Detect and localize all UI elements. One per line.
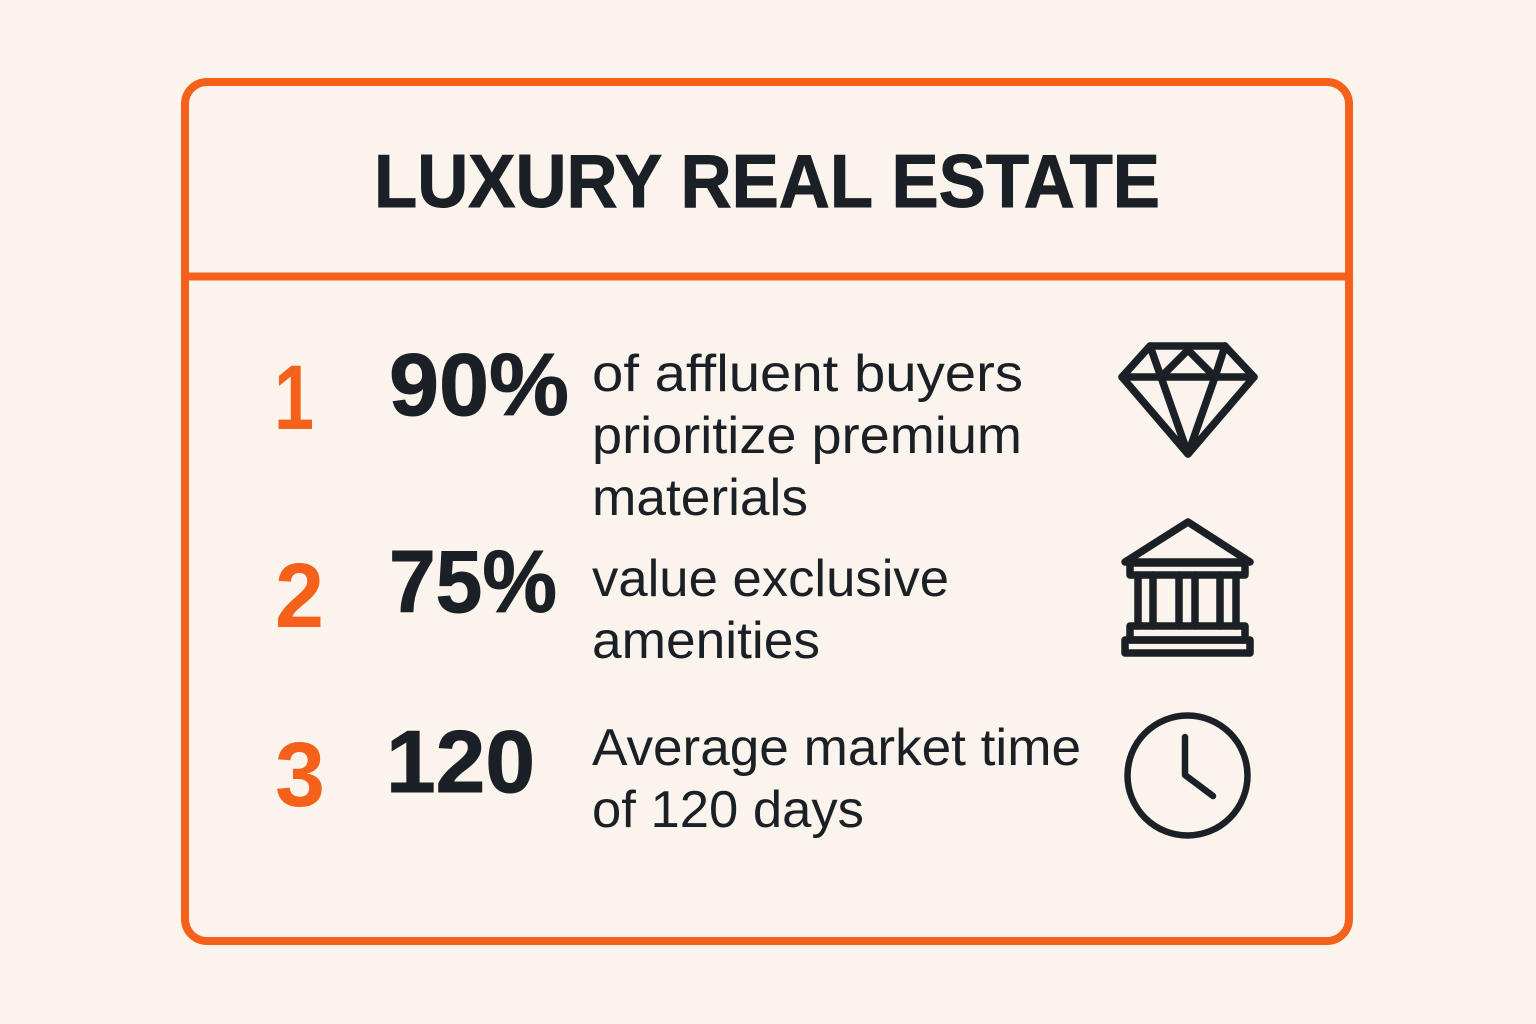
- description: premium materials: [592, 345, 1023, 527]
- description: premium materials: materials: [592, 469, 808, 527]
- stat 90%: 90%: [389, 335, 569, 434]
- title: LUXURY REAL ESTATE: [374, 139, 1160, 223]
- description: exclusive amenities: [592, 550, 949, 670]
- description: premium materials: prioritize premium: [592, 407, 1022, 465]
- icon: clock: [1128, 716, 1248, 836]
- number 1: 1: [274, 347, 314, 449]
- description: premium materials: of affluent buyers: [592, 345, 1023, 403]
- row 2: exclusive amenities: [275, 522, 1250, 670]
- description: exclusive amenities: value exclusive: [592, 550, 949, 608]
- description: market time: [592, 719, 1081, 839]
- icon: diamond: [1122, 346, 1254, 454]
- icon: classical building: [1125, 522, 1250, 653]
- description: market time: of 120 days: [592, 781, 864, 839]
- stat 75%: 75%: [389, 532, 557, 631]
- stat 120: 120: [386, 712, 535, 811]
- description: exclusive amenities: amenities: [592, 612, 820, 670]
- number 2: 2: [275, 545, 324, 647]
- number 3: 3: [275, 724, 325, 826]
- description: market time: Average market time: [592, 719, 1081, 777]
- panel: luxury real estate card: [185, 82, 1349, 941]
- row 3: market time: [275, 712, 1248, 839]
- row 1: premium materials: [274, 335, 1254, 527]
